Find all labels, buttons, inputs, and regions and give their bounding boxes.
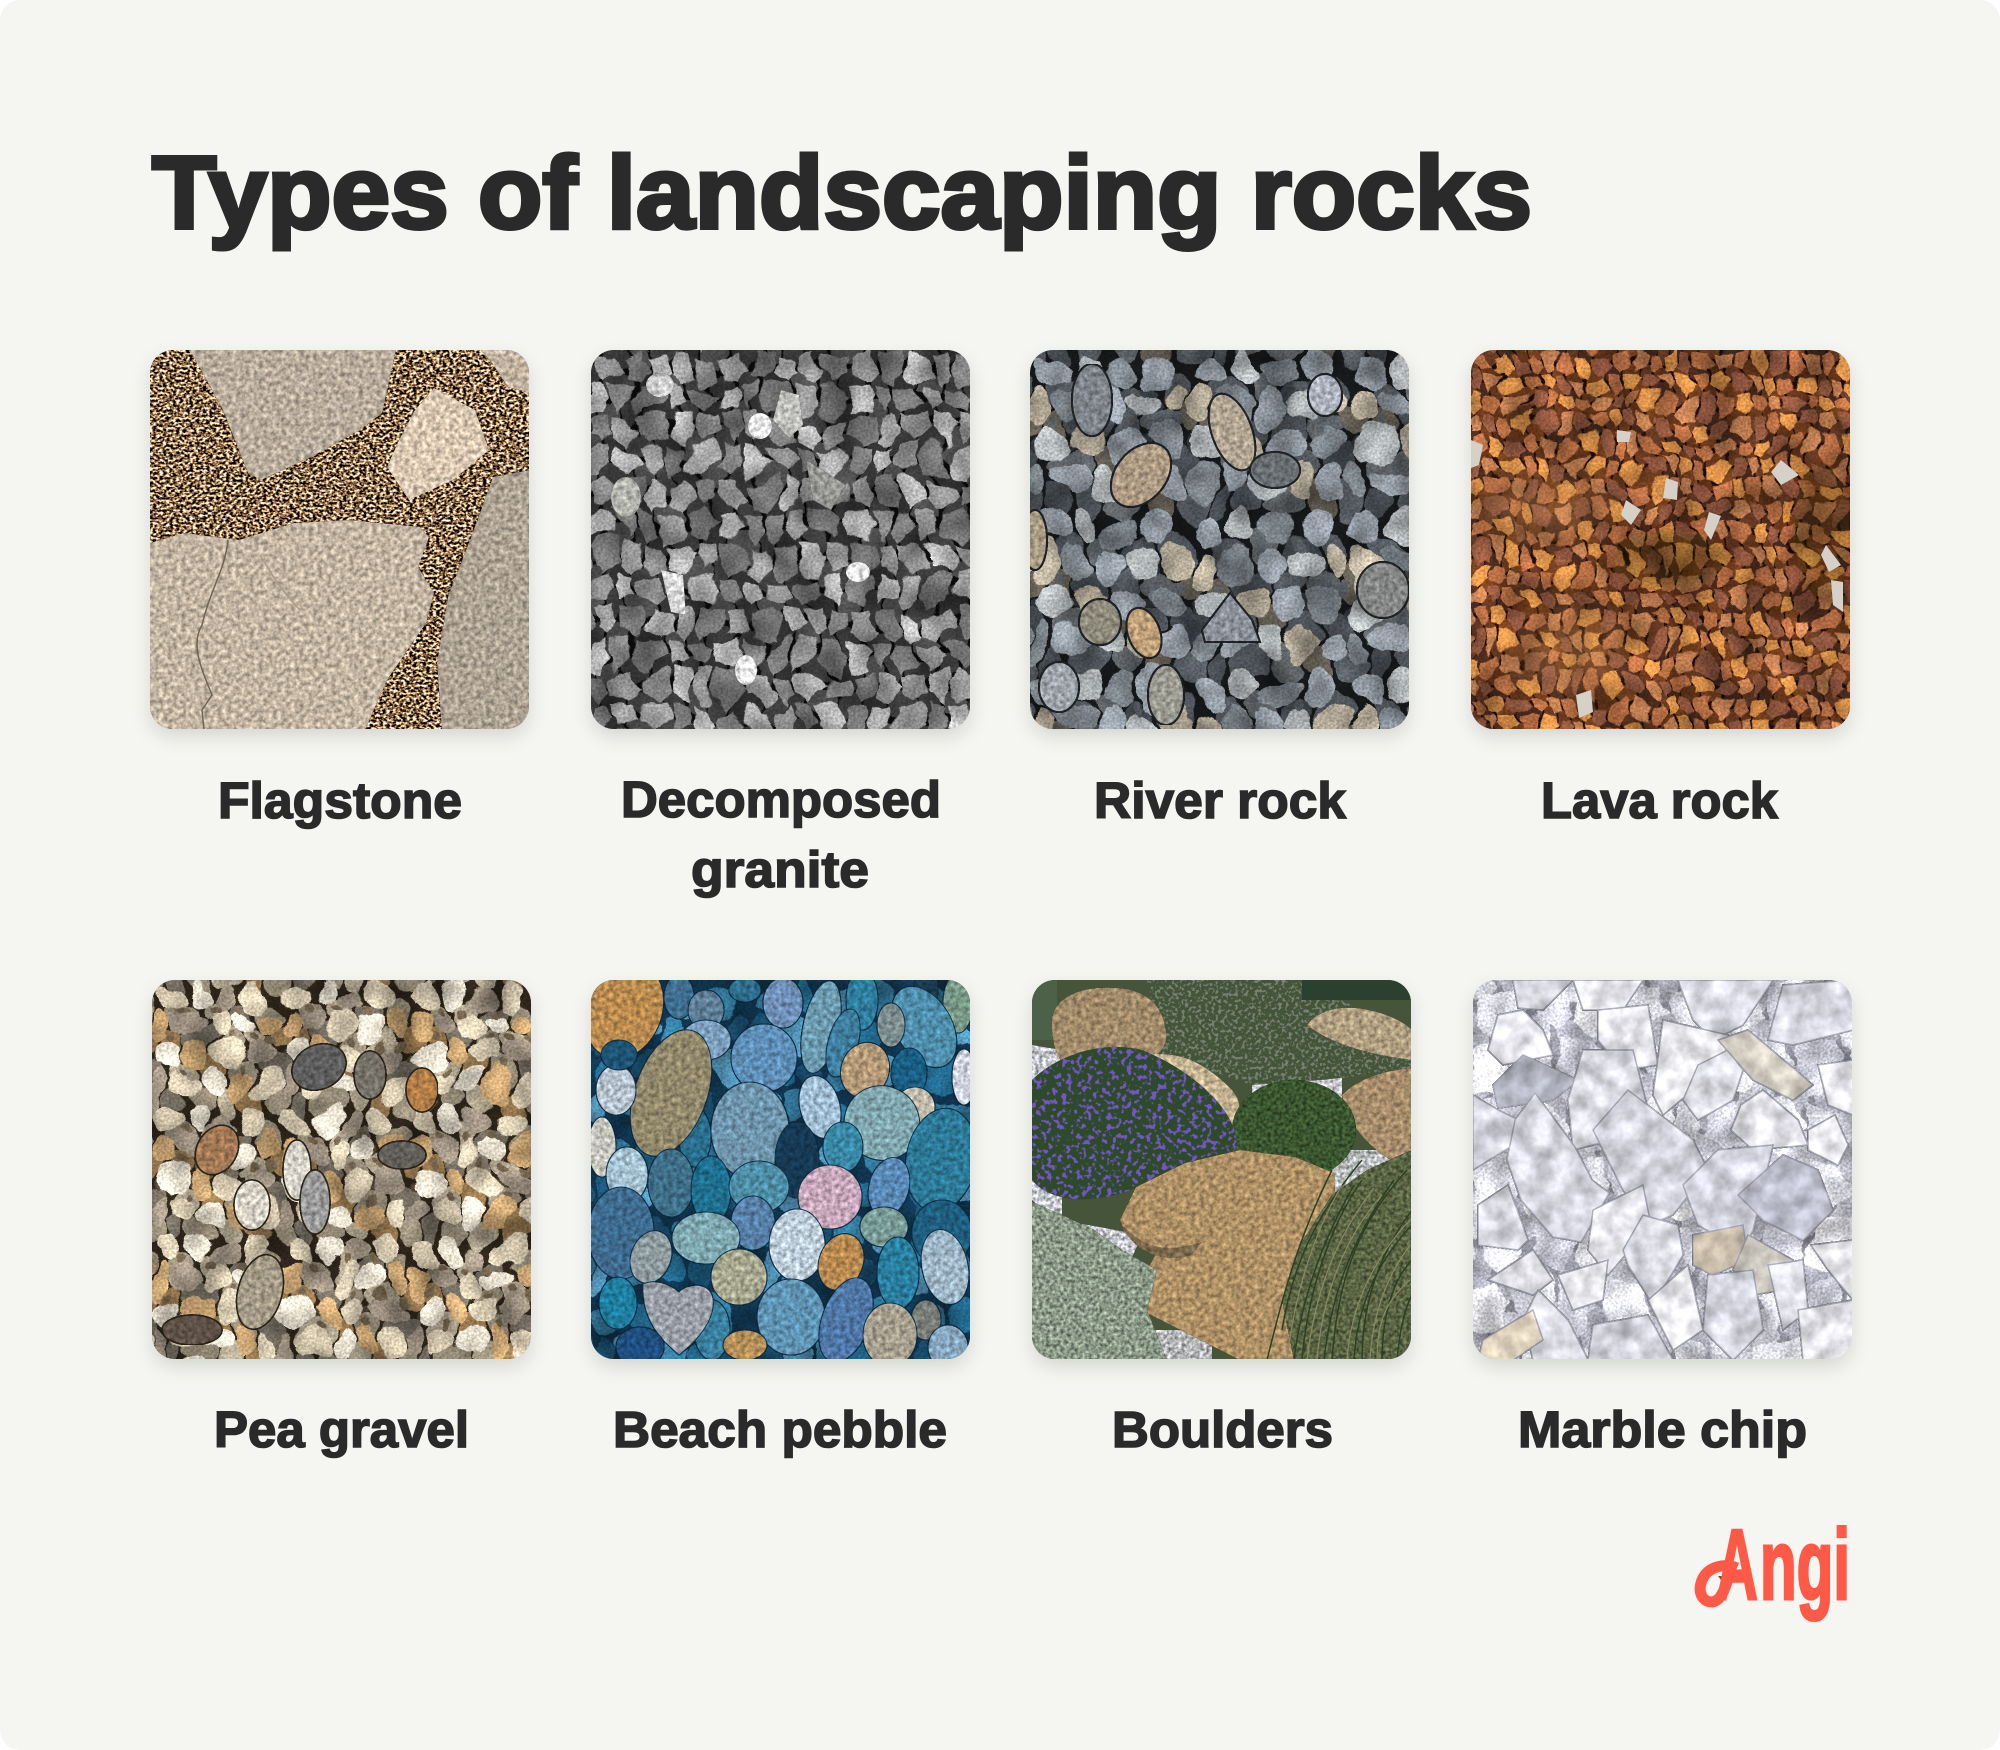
logo: Angi: A xyxy=(1716,1509,1758,1621)
sage bush xyxy=(1032,1202,1167,1360)
individual pebbles xyxy=(162,1035,438,1345)
rocks and shrubs xyxy=(1052,988,1412,1170)
panel: pea gravel xyxy=(146,980,537,1373)
panel: marble chip xyxy=(1433,940,1893,1400)
pebble texture xyxy=(1030,350,1409,729)
label: Decomposed granite xyxy=(621,771,941,898)
label: Decomposed granite: granite xyxy=(691,841,869,898)
lava gravel texture xyxy=(1471,350,1850,729)
dark background pebbles xyxy=(551,940,1011,1400)
title: Types of landscaping rocks xyxy=(152,135,1532,250)
pale fragments xyxy=(1471,430,1843,718)
panel: river rock xyxy=(1024,350,1415,743)
logo: Angi xyxy=(1700,1509,1850,1621)
crushed stone texture xyxy=(591,350,970,729)
purple flower bush xyxy=(1032,1047,1237,1199)
gravel texture xyxy=(152,980,531,1359)
panel: beach pebble xyxy=(551,940,1011,1400)
flagstone slabs xyxy=(150,350,530,730)
gravel bed texture xyxy=(150,350,530,730)
lavender shrub xyxy=(1147,980,1412,1085)
label: Boulders: Boulders xyxy=(1112,1401,1333,1458)
panel: flagstone xyxy=(150,350,530,730)
individual river stones xyxy=(1023,364,1409,725)
label: Flagstone: Flagstone xyxy=(218,772,462,829)
label: Decomposed granite: Decomposed xyxy=(621,771,941,828)
logo: Angi: ngi xyxy=(1760,1509,1850,1621)
panel: decomposed granite xyxy=(585,350,976,743)
label: Beach pebble: Beach pebble xyxy=(613,1401,947,1458)
label: Pea gravel: Pea gravel xyxy=(214,1401,469,1458)
white marble chips xyxy=(1473,980,1853,1360)
lighter stones xyxy=(611,373,870,685)
panel: boulders xyxy=(1032,980,1412,1360)
label: River rock: River rock xyxy=(1094,772,1347,829)
panel: lava rock xyxy=(1465,350,1856,743)
label: Lava rock: Lava rock xyxy=(1541,772,1779,829)
label: Marble chip: Marble chip xyxy=(1518,1401,1807,1458)
ornamental grass xyxy=(1282,1150,1412,1360)
blue, tan and pink beach pebbles xyxy=(571,950,984,1370)
white gravel xyxy=(1032,1045,1412,1360)
large boulder xyxy=(1120,1150,1344,1360)
background chips xyxy=(1433,940,1893,1400)
green shrub xyxy=(1232,1080,1356,1180)
low-frequency tone patches xyxy=(1481,460,1849,685)
